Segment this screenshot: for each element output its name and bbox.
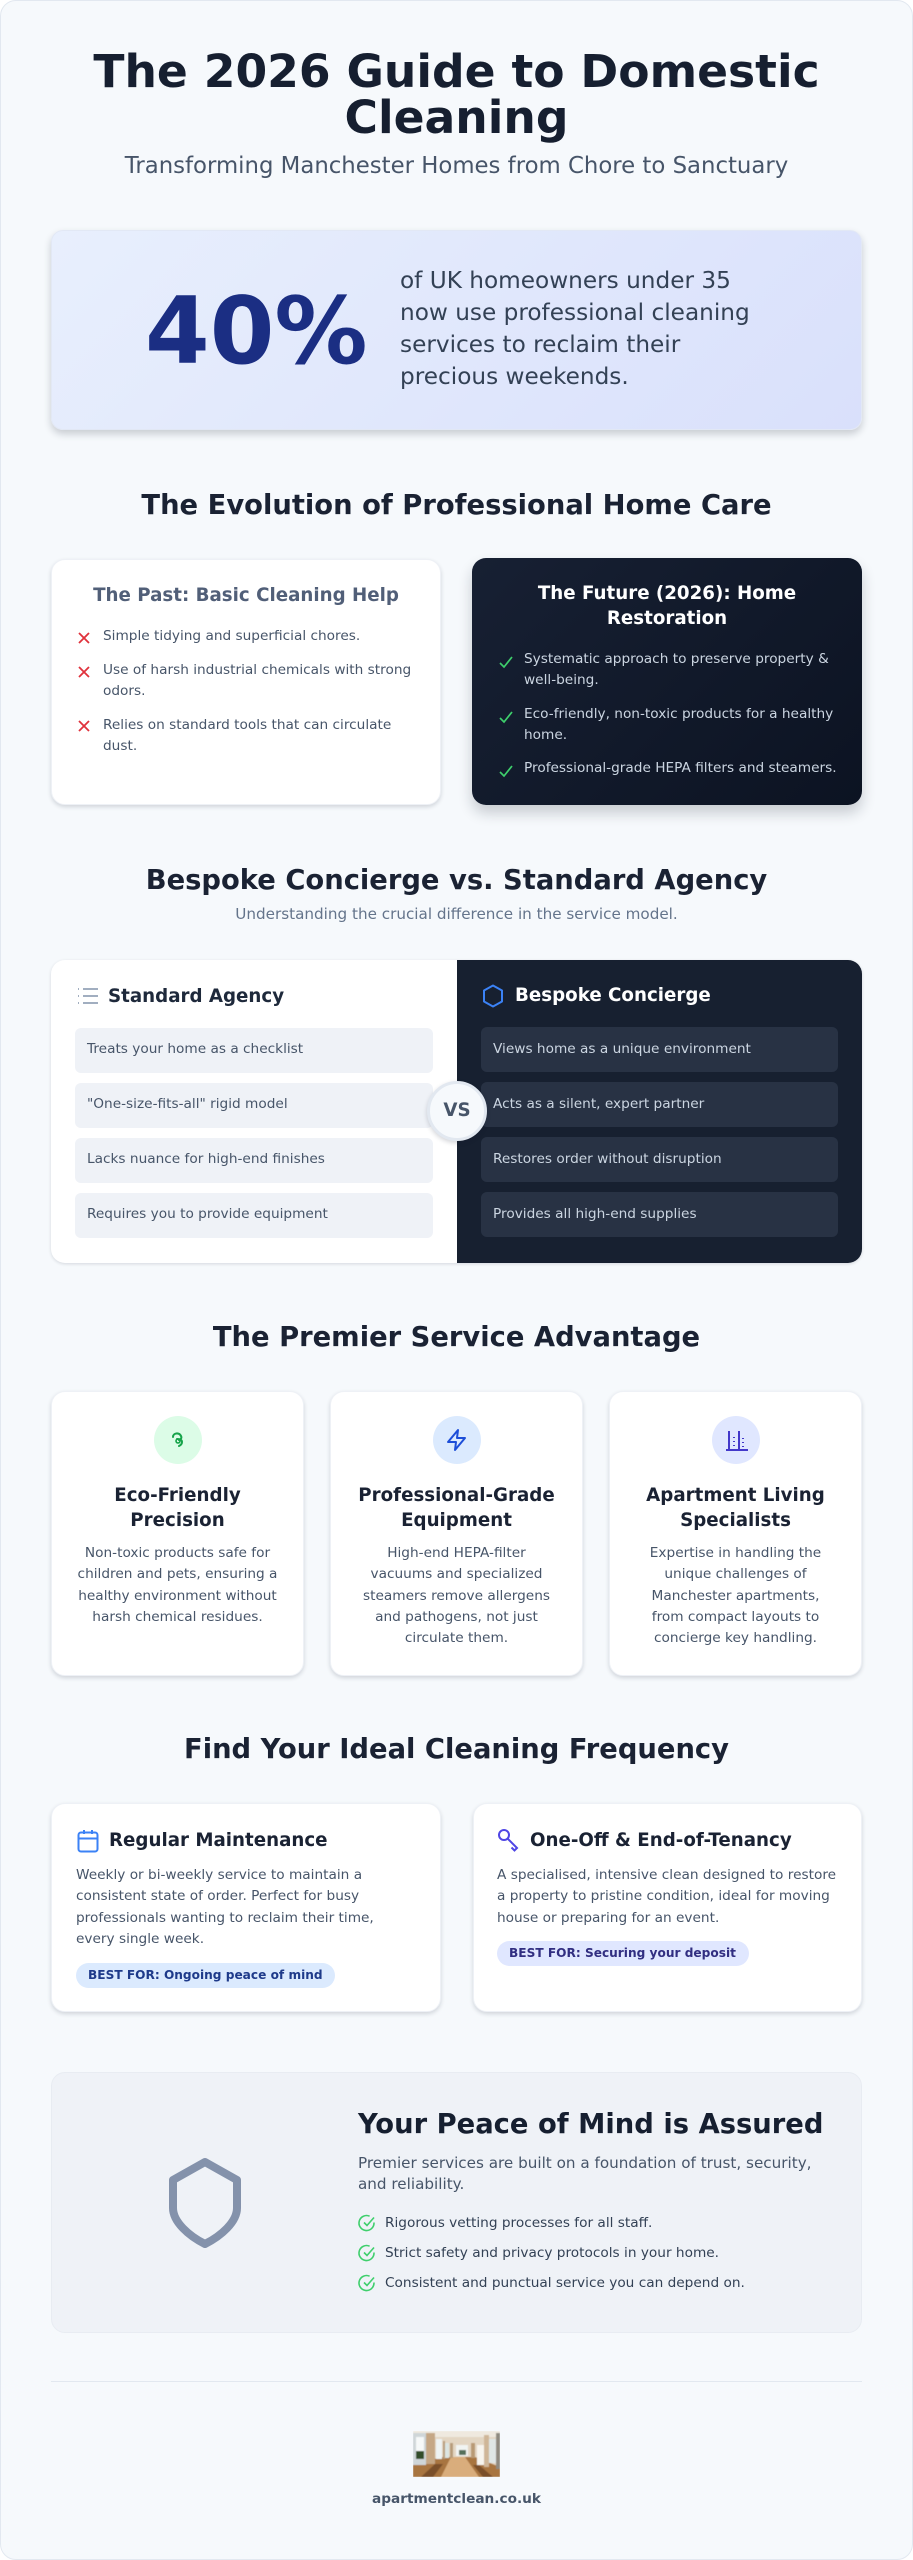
icon: eco	[154, 1416, 202, 1464]
future item 1	[524, 651, 829, 688]
apartment text: Expertise in handling the	[650, 1545, 821, 1561]
one-off text	[497, 1867, 836, 1926]
standard row 4	[75, 1193, 433, 1238]
future item 3: Professional-grade HEPA filters and steamers.	[524, 760, 837, 776]
icon: check	[500, 766, 513, 778]
title	[93, 45, 820, 144]
bespoke row 4: Provides all high-end supplies	[493, 1206, 697, 1222]
apartment text: unique challenges of	[664, 1566, 807, 1582]
equipment text	[363, 1545, 550, 1646]
one-off text: a property to pristine condition, ideal for moving	[497, 1888, 830, 1904]
eco text: harsh chemical residues.	[92, 1609, 263, 1625]
icon: cross	[78, 666, 90, 678]
one-off heading: One-Off & End-of-Tenancy	[530, 1830, 792, 1851]
icon: check	[500, 656, 513, 668]
future item 1: well-being.	[524, 672, 599, 688]
item text: Consistent and punctual service you can depend on.	[385, 2275, 745, 2291]
past item 2: Use of harsh industrial chemicals with strong	[103, 662, 411, 678]
past item 2: odors.	[103, 683, 146, 699]
apartment heading: Specialists	[680, 1510, 791, 1530]
equipment text: steamers remove allergens	[363, 1588, 550, 1604]
icon: circle check	[358, 2274, 375, 2292]
bespoke concierge heading: Bespoke Concierge	[515, 985, 711, 1006]
item text: Rigorous vetting processes for all staff.	[385, 2215, 652, 2231]
future item 1: Systematic approach to preserve property &	[524, 651, 829, 667]
eco heading	[114, 1485, 241, 1530]
apartment text: from compact layouts to	[652, 1609, 819, 1625]
equipment text: circulate them.	[405, 1630, 508, 1646]
panel: bespoke dark side	[456, 960, 862, 1263]
panel: regular maintenance	[51, 1803, 441, 2012]
standard agency heading: Standard Agency	[108, 986, 284, 1007]
panel: the past	[51, 559, 441, 805]
footer photo: apartment interior	[413, 2431, 500, 2477]
one-off text: A specialised, intensive clean designed to restore	[497, 1867, 836, 1883]
one-off badge	[497, 1941, 749, 1966]
heading: comparison: Bespoke Concierge vs. Standard Agency	[146, 865, 767, 896]
assurance text: and reliability.	[358, 2175, 464, 2193]
equipment heading: Professional-Grade	[358, 1485, 555, 1506]
apartment heading	[646, 1485, 825, 1530]
regular text: every single week.	[76, 1931, 204, 1947]
icon: cross	[78, 632, 90, 644]
panel: eco-friendly	[51, 1391, 304, 1676]
VS badge: VS	[443, 1100, 471, 1121]
past item 3: Relies on standard tools that can circulate	[103, 717, 391, 733]
icon: key	[498, 1829, 518, 1852]
icon: circle check	[358, 2244, 375, 2262]
icon: check	[500, 712, 513, 724]
eco text: Non-toxic products safe for	[85, 1545, 270, 1561]
icon: buildings	[712, 1416, 760, 1464]
regular text: professionals wanting to reclaim their time,	[76, 1910, 374, 1926]
equipment text: and pathogens, not just	[375, 1609, 538, 1625]
VS badge	[427, 1081, 487, 1141]
eco heading: Eco-Friendly	[114, 1485, 241, 1506]
future item 2	[524, 706, 833, 743]
equipment heading: Equipment	[401, 1510, 512, 1530]
eco heading: Precision	[130, 1510, 225, 1530]
standard rows	[75, 1028, 433, 1238]
future heading: The Future (2026): Home	[538, 583, 796, 604]
panel: the future	[472, 558, 862, 805]
eco text	[78, 1545, 277, 1625]
apartment text: concierge key handling.	[654, 1630, 817, 1646]
eco text: children and pets, ensuring a	[78, 1566, 277, 1582]
past item 3	[103, 717, 391, 754]
equipment text: High-end HEPA-filter	[387, 1545, 526, 1561]
big number 40%: 40%	[145, 277, 368, 385]
assurance text	[358, 2154, 812, 2193]
one-off badge: BEST FOR: Securing your deposit	[509, 1946, 736, 1960]
icon: cross	[78, 720, 90, 732]
future heading: Restoration	[607, 608, 727, 629]
statistic description: services to reclaim their	[400, 331, 680, 358]
eco text: healthy environment without	[78, 1588, 277, 1604]
item text: Strict safety and privacy protocols in your home.	[385, 2245, 719, 2261]
assurance item 2	[358, 2244, 719, 2262]
panel: peace of mind	[51, 2072, 862, 2333]
standard row 1	[75, 1028, 433, 1073]
regular heading: Regular Maintenance	[109, 1830, 328, 1851]
equipment heading	[358, 1485, 555, 1530]
statistic description: precious weekends.	[400, 363, 629, 390]
one-off text: house or preparing for an event.	[497, 1910, 719, 1926]
panel: hero statistic	[51, 230, 862, 430]
assurance item 3	[358, 2274, 745, 2292]
regular text: consistent state of order. Perfect for busy	[76, 1888, 359, 1904]
regular text	[76, 1867, 374, 1947]
assurance text: Premier services are built on a foundation of trust, security,	[358, 2154, 812, 2172]
regular badge: BEST FOR: Ongoing peace of mind	[88, 1968, 323, 1982]
standard row 3: Lacks nuance for high-end finishes	[87, 1151, 325, 1167]
panel: equipment	[330, 1391, 583, 1676]
icon: calendar	[78, 1830, 98, 1852]
equipment text: vacuums and specialized	[371, 1566, 542, 1582]
past item 2	[103, 662, 411, 699]
regular text: Weekly or bi-weekly service to maintain a	[76, 1867, 362, 1883]
statistic description: of UK homeowners under 35	[400, 267, 731, 294]
comparison subheading: Understanding the crucial difference in the service model.	[235, 905, 678, 923]
bespoke row 3: Restores order without disruption	[493, 1151, 722, 1167]
bespoke row 3	[481, 1137, 838, 1182]
past heading: The Past: Basic Cleaning Help	[93, 585, 399, 606]
bespoke row 1	[481, 1027, 838, 1072]
panel: comparison	[51, 960, 862, 1263]
apartment text: Manchester apartments,	[652, 1588, 819, 1604]
bespoke row 2: Acts as a silent, expert partner	[493, 1096, 704, 1112]
title: Cleaning	[345, 91, 568, 144]
heading: evolution: The Evolution of Professional Home Care	[141, 490, 772, 521]
panel: one-off	[473, 1803, 862, 2012]
future item 2: home.	[524, 727, 567, 743]
apartment text	[650, 1545, 821, 1646]
bespoke row 1: Views home as a unique environment	[493, 1041, 751, 1057]
bespoke rows	[481, 1027, 838, 1237]
heading: advantage: The Premier Service Advantage	[213, 1322, 700, 1353]
standard row 1: Treats your home as a checklist	[87, 1041, 303, 1057]
bespoke row 4	[481, 1192, 838, 1237]
icon: hexagon	[483, 984, 503, 1008]
standard row 3	[75, 1138, 433, 1183]
regular badge	[76, 1963, 335, 1988]
panel: apartment specialists	[609, 1391, 862, 1676]
subtitle: Transforming Manchester Homes from Chore to Sanctuary	[125, 153, 788, 179]
icon: circle check	[358, 2214, 375, 2232]
footer website: apartmentclean.co.uk	[372, 2491, 541, 2507]
future heading	[538, 583, 796, 629]
title: The 2026 Guide to Domestic	[93, 45, 820, 98]
standard row 4: Requires you to provide equipment	[87, 1206, 328, 1222]
heading: frequency: Find Your Ideal Cleaning Frequency	[184, 1734, 729, 1765]
apartment heading: Apartment Living	[646, 1485, 825, 1506]
standard row 2	[75, 1083, 433, 1128]
statistic description: now use professional cleaning	[400, 299, 750, 326]
past item 1: Simple tidying and superficial chores.	[103, 628, 360, 644]
standard row 2: "One-size-fits-all" rigid model	[87, 1096, 288, 1112]
icon: shield	[169, 2158, 241, 2248]
assurance heading: Your Peace of Mind is Assured	[358, 2109, 823, 2140]
past item 3: dust.	[103, 738, 137, 754]
assurance item 1	[358, 2214, 652, 2232]
icon: list	[78, 988, 98, 1004]
statistic description	[400, 267, 750, 390]
future item 2: Eco-friendly, non-toxic products for a healthy	[524, 706, 833, 722]
icon: lightning bolt	[433, 1416, 481, 1464]
bespoke row 2	[481, 1082, 838, 1127]
